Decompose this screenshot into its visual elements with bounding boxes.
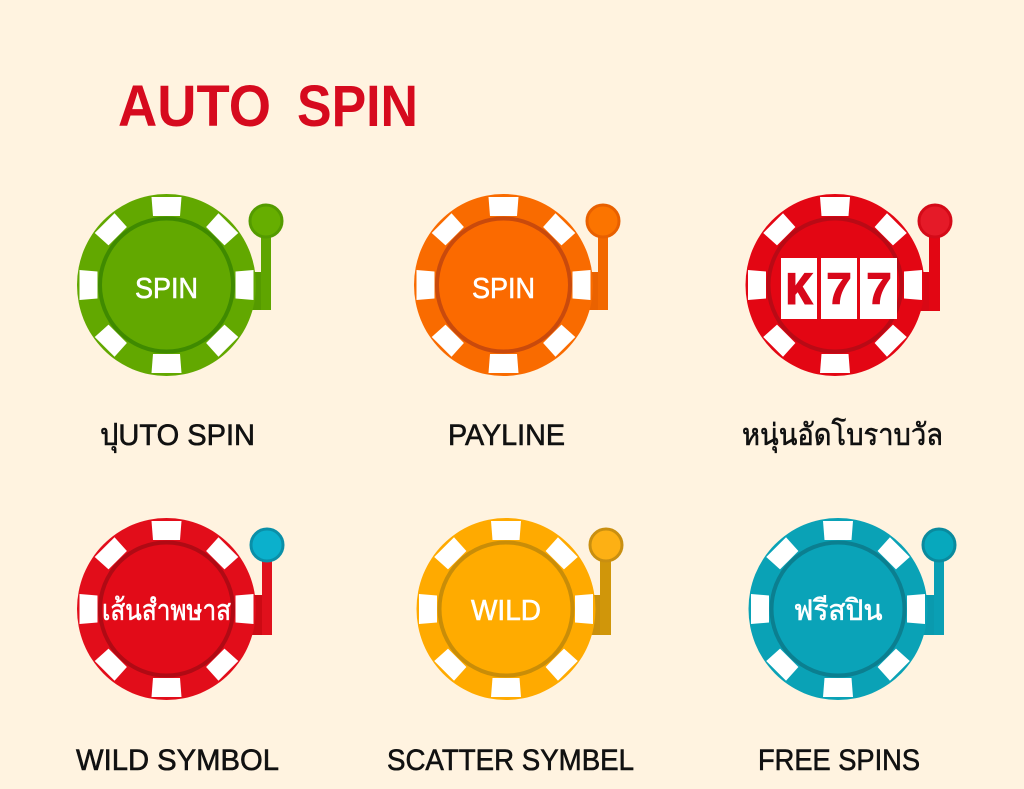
title: AUTO [118, 74, 271, 139]
icon: amber chip [416, 518, 596, 700]
reels [781, 258, 897, 319]
reels: 7 [865, 266, 893, 318]
panel: slot machine [742, 194, 951, 454]
icon: green chip: SPIN [135, 273, 198, 305]
label: auto spin: ปุUTO SPIN [100, 419, 255, 454]
label: wild symbol: WILD SYMBOL [76, 744, 279, 777]
label: free spins: FREE SPINS [758, 744, 920, 777]
panel: wild symbol [76, 518, 283, 777]
label: scatter symbol: SCATTER SYMBEL [387, 744, 634, 777]
icon: green slot lever [250, 205, 282, 310]
icon: teal chip [748, 518, 928, 700]
icon: red chip with reels [746, 194, 924, 376]
icon: green chip [77, 194, 256, 376]
panel: scatter symbol [387, 518, 634, 777]
panel: payline [414, 194, 619, 452]
icon: red chip: เส้นสำพษาส [102, 595, 231, 627]
icon: amber chip: WILD [471, 595, 541, 627]
reels: K [785, 266, 813, 318]
icon: red slot lever [919, 205, 951, 311]
panel: auto spin [77, 194, 282, 454]
icon: red chip [77, 518, 256, 700]
reels: 7 [825, 266, 853, 318]
label: payline: PAYLINE [448, 419, 565, 452]
icon: teal chip: ฟรีสปิน [794, 595, 883, 627]
title: SPIN [297, 74, 418, 139]
icon: teal slot lever [922, 529, 955, 635]
icon: orange chip [414, 194, 593, 376]
icon: orange slot lever [587, 205, 619, 310]
icon: red slot lever with blue knob [250, 529, 283, 635]
panel: free spins [748, 518, 955, 777]
icon: amber slot lever [590, 529, 622, 635]
label: slot machine thai: หนุ่นอัดโบราบวัล [742, 417, 943, 454]
icon: orange chip: SPIN [472, 273, 535, 305]
